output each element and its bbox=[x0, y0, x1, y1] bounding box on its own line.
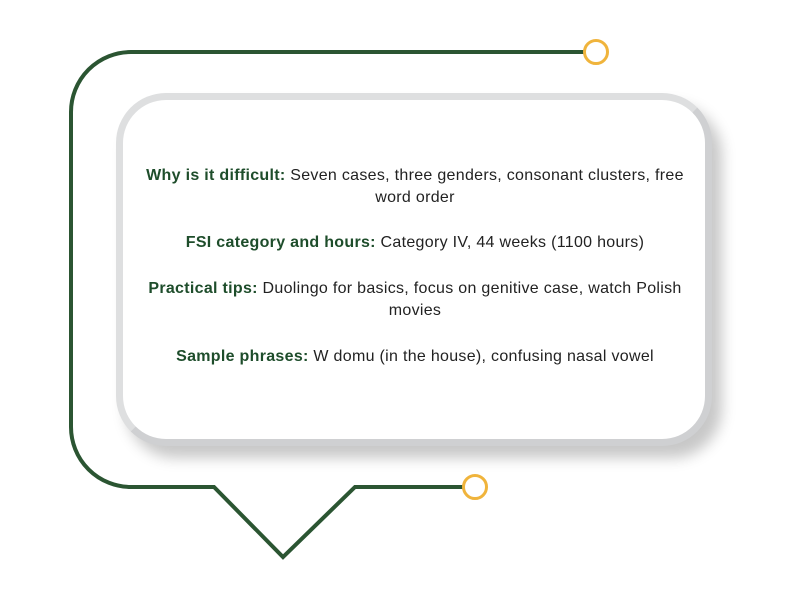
text: tips: Practical tips: Duolingo for basics, focus on genitive case, watch Polish bbox=[148, 280, 682, 297]
top circle bbox=[584, 40, 608, 64]
green outline path bbox=[71, 52, 585, 557]
text: FSI: FSI category and hours: Category IV, 44 weeks (1100 hours) bbox=[186, 234, 644, 251]
text: why difficult: word order bbox=[375, 189, 455, 206]
text: phrases: Sample phrases: W domu (in the house), confusing nasal vowel bbox=[176, 348, 654, 365]
text: tips: movies bbox=[389, 302, 441, 319]
text: why difficult bbox=[146, 167, 684, 206]
bottom circle bbox=[464, 476, 486, 498]
text: why difficult: Why is it difficult: Seven cases, three genders, consonant clusters, free bbox=[146, 167, 684, 184]
text: tips bbox=[148, 280, 682, 319]
panel: card bbox=[116, 93, 712, 446]
